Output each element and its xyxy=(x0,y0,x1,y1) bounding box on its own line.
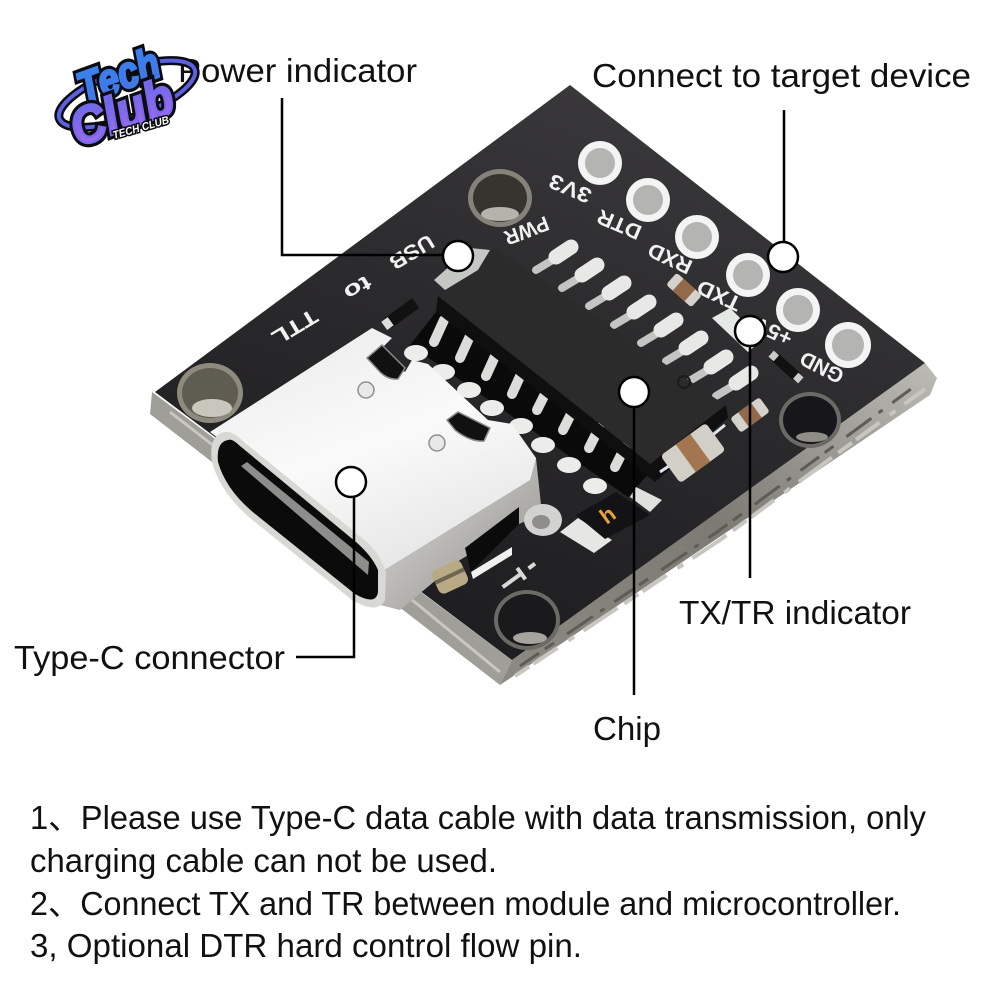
silkscreen labels: 3V3 xyxy=(546,169,595,207)
label: Power indicator: Power indicator xyxy=(178,52,417,89)
notes text block: 2、Connect TX and TR between module and microcontroller. xyxy=(30,885,901,922)
photo: USB to TTL board xyxy=(150,85,937,685)
logo: Tech Club: Club xyxy=(62,68,182,158)
logo: Tech Club xyxy=(51,39,203,158)
chip shadow and lower pins xyxy=(404,312,650,497)
logo: Tech Club: Tech xyxy=(71,39,166,113)
silkscreen labels: to xyxy=(339,271,375,305)
notes text block xyxy=(30,799,926,964)
silkscreen labels: USB xyxy=(385,229,438,274)
silkscreen labels xyxy=(267,169,848,387)
silkscreen labels: DTR xyxy=(594,204,645,244)
connector opening xyxy=(211,432,386,608)
label: Connect to target device xyxy=(592,57,971,272)
notes text block: charging cable can not be used. xyxy=(30,842,497,879)
board top face xyxy=(155,85,925,660)
label: Type-C connector xyxy=(14,467,366,676)
chip upper pins xyxy=(536,247,751,396)
logo: Tech Club: TECH CLUB xyxy=(112,114,171,142)
connector top shell xyxy=(210,328,536,572)
label: Connect to target device: Connect to target device xyxy=(592,57,971,94)
label: TX/TR indicator: TX/TR indicator xyxy=(679,594,911,631)
label: TX/TR indicator xyxy=(679,316,911,631)
label: Chip: Chip xyxy=(593,710,661,747)
silkscreen labels: PWR xyxy=(501,211,552,249)
notes text block: 1、Please use Type-C data cable with data transmission, only xyxy=(30,799,926,836)
silkscreen labels: RXD xyxy=(645,238,696,278)
through-hole pads xyxy=(578,141,871,368)
USB-C connector xyxy=(210,328,562,610)
logo: Tech Club: Tech xyxy=(71,39,166,113)
label: Power indicator xyxy=(178,52,473,271)
mounting holes xyxy=(177,169,841,650)
connector notches and rivets xyxy=(358,345,490,451)
notes text block: 3, Optional DTR hard control flow pin. xyxy=(30,927,582,964)
diode xyxy=(560,487,662,553)
silkscreen labels: TTL xyxy=(267,304,322,349)
silkscreen labels: GND xyxy=(796,346,848,387)
silkscreen labels: +5V xyxy=(750,312,796,350)
chip body xyxy=(436,248,728,482)
logo: Tech Club: Club xyxy=(62,68,182,158)
label: Chip xyxy=(593,377,661,747)
capacitors and small parts xyxy=(381,248,804,593)
diode: h xyxy=(595,501,620,529)
connector side and tab xyxy=(380,458,562,610)
label: Type-C connector: Type-C connector xyxy=(14,639,285,676)
silkscreen labels: TXD xyxy=(694,275,745,315)
board edge xyxy=(150,363,937,685)
